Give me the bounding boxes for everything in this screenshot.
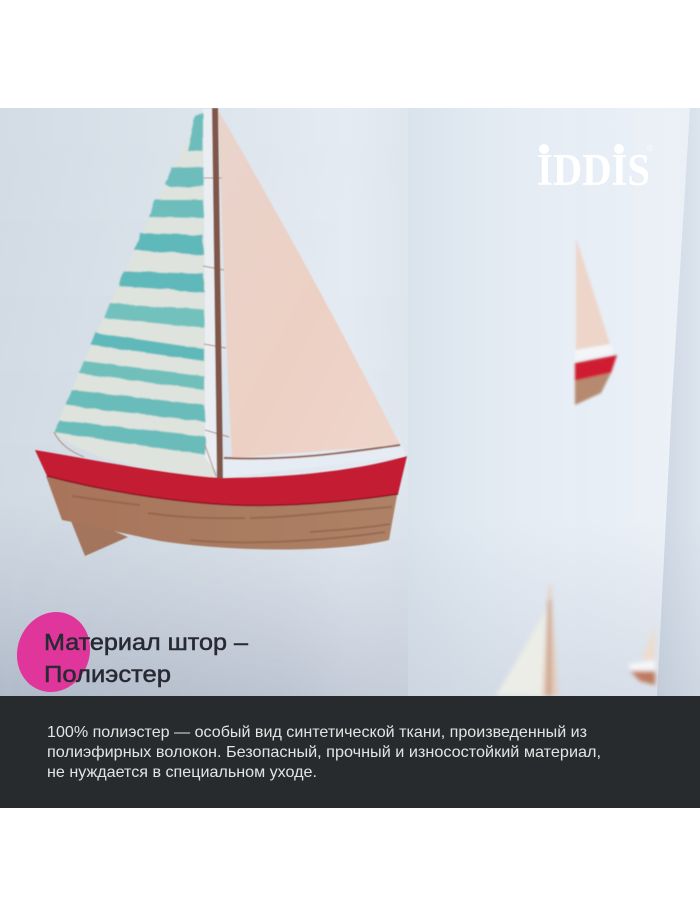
curtain fold middle [408, 108, 578, 696]
small blurred boat behind fold [575, 238, 617, 405]
heading: Полиэстер [44, 661, 171, 687]
description text: полиэфирных волокон. Безопасный, прочный и износостойкий материал, [47, 744, 601, 761]
boom [224, 445, 400, 459]
heading [44, 629, 248, 687]
turquoise sail stripes [54, 113, 205, 455]
hull red band [35, 450, 407, 506]
description text [47, 724, 601, 781]
blurred far boat fragment [628, 625, 655, 685]
white strip beside mast [203, 108, 218, 472]
hull plank lines [72, 496, 392, 542]
description text: 100% полиэстер — особый вид синтетической ткани, произведенный из [47, 724, 587, 741]
blurred bottom sail behind fold [496, 585, 558, 696]
photo: shower curtain folds [0, 108, 700, 696]
curtain fold far right [657, 108, 700, 696]
curtain fold left [0, 108, 408, 696]
hull wood [46, 476, 398, 550]
curtain lower shadow [0, 536, 408, 696]
left sail [54, 109, 214, 478]
hull red band dark lower edge [47, 476, 398, 506]
pink main sail [218, 110, 400, 458]
sailboat illustration [35, 108, 407, 556]
white strip under main sail [222, 447, 406, 478]
curtain fold right [576, 108, 700, 696]
logo: iddis: IDDIS [537, 145, 650, 195]
keel [71, 521, 128, 556]
mast [212, 108, 223, 478]
heading: Материал штор – [44, 629, 248, 655]
logo: iddis: ® [647, 143, 654, 153]
pink blob accent [6, 602, 101, 702]
rigging ties [54, 178, 229, 476]
description text: не нуждается в специальном уходе. [47, 764, 317, 781]
dark description band [0, 696, 700, 808]
curtain lower shadow right [408, 598, 700, 696]
